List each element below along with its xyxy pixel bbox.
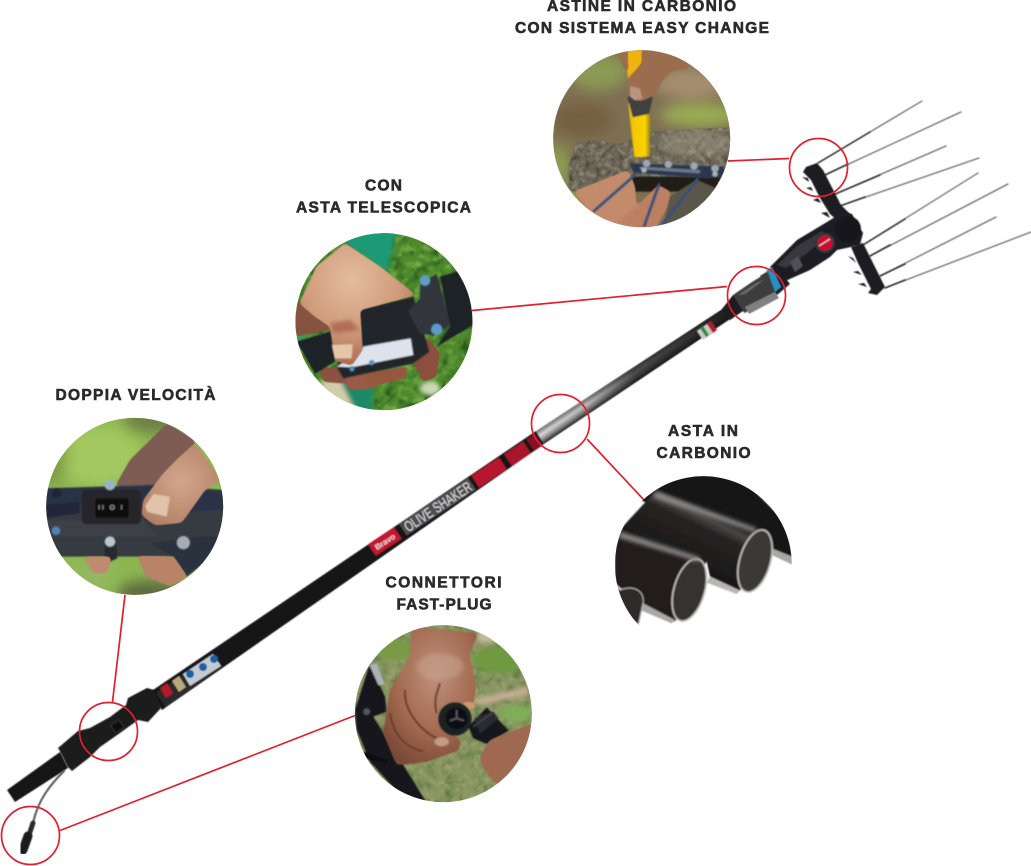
head crossbar (802, 163, 885, 295)
heading: doppia velocita: DOPPIA VELOCITÀ (56, 387, 216, 404)
heading: connettori fast-plug: CONNETTORI (386, 574, 502, 592)
blue bolts (420, 275, 430, 286)
tube highlights (618, 492, 757, 562)
shaft sticker near grip (156, 654, 222, 707)
power cable and fast-plug connector (23, 771, 64, 850)
switch (82, 489, 141, 524)
carbon and silver shaft (150, 306, 733, 710)
callout lines (60, 158, 789, 830)
upper hand (619, 50, 688, 102)
red highlight circles (2, 138, 848, 864)
shaft labels: Bravo (373, 532, 397, 552)
photo: double speed switch (46, 418, 224, 595)
shaft labels: OLIVE SHAKER (401, 479, 476, 536)
plug (438, 702, 472, 736)
silver plate (337, 338, 413, 367)
italian flag sticker (697, 321, 717, 340)
rock (568, 127, 732, 192)
wrist and lower fingers (293, 300, 439, 390)
screwdriver (628, 102, 651, 157)
carbon rods (593, 175, 698, 227)
heading: astine in carbonio: CON SISTEMA EASY CHANGE (515, 20, 769, 37)
heading: connettori fast-plug (386, 574, 502, 614)
black frame (355, 663, 426, 802)
telescopic sleeve and blue ring (722, 266, 790, 320)
mounting plate (630, 163, 725, 178)
photo: carbon tubes (613, 470, 797, 625)
heading: asta telescopica (296, 178, 471, 216)
large tube (621, 490, 752, 592)
front tube (615, 530, 707, 622)
hand (299, 243, 416, 366)
heading: connettori fast-plug: FAST-PLUG (396, 596, 492, 614)
heading: asta in carbonio: ASTA IN (668, 423, 738, 440)
tube and body (297, 330, 335, 374)
photo: fast-plug connectors (350, 620, 537, 807)
right hand (480, 723, 533, 785)
screws (105, 480, 115, 490)
heading: asta telescopica: CON (365, 178, 402, 194)
thumb (142, 443, 221, 525)
photo: easy change tines (553, 50, 730, 228)
small tube end (615, 583, 643, 625)
heading: asta in carbonio (656, 423, 750, 462)
left hand (383, 627, 478, 765)
red badge (815, 233, 835, 253)
grip with double speed switch (7, 688, 161, 802)
lower fingers (83, 556, 187, 586)
lower hand (573, 170, 671, 232)
heading: astine in carbonio (515, 0, 769, 37)
photo: double speed switch: II O I (98, 504, 125, 511)
photo: telescopic pole (295, 233, 472, 410)
carbon tines (818, 101, 1031, 288)
shaft labels (368, 433, 544, 558)
heading: asta in carbonio: CARBONIO (656, 445, 750, 462)
background tube (641, 476, 792, 558)
hand back (115, 423, 197, 488)
socket (468, 707, 509, 744)
motor head (770, 212, 863, 282)
heading: asta telescopica: ASTA TELESCOPICA (296, 200, 471, 216)
tool body (45, 485, 225, 557)
